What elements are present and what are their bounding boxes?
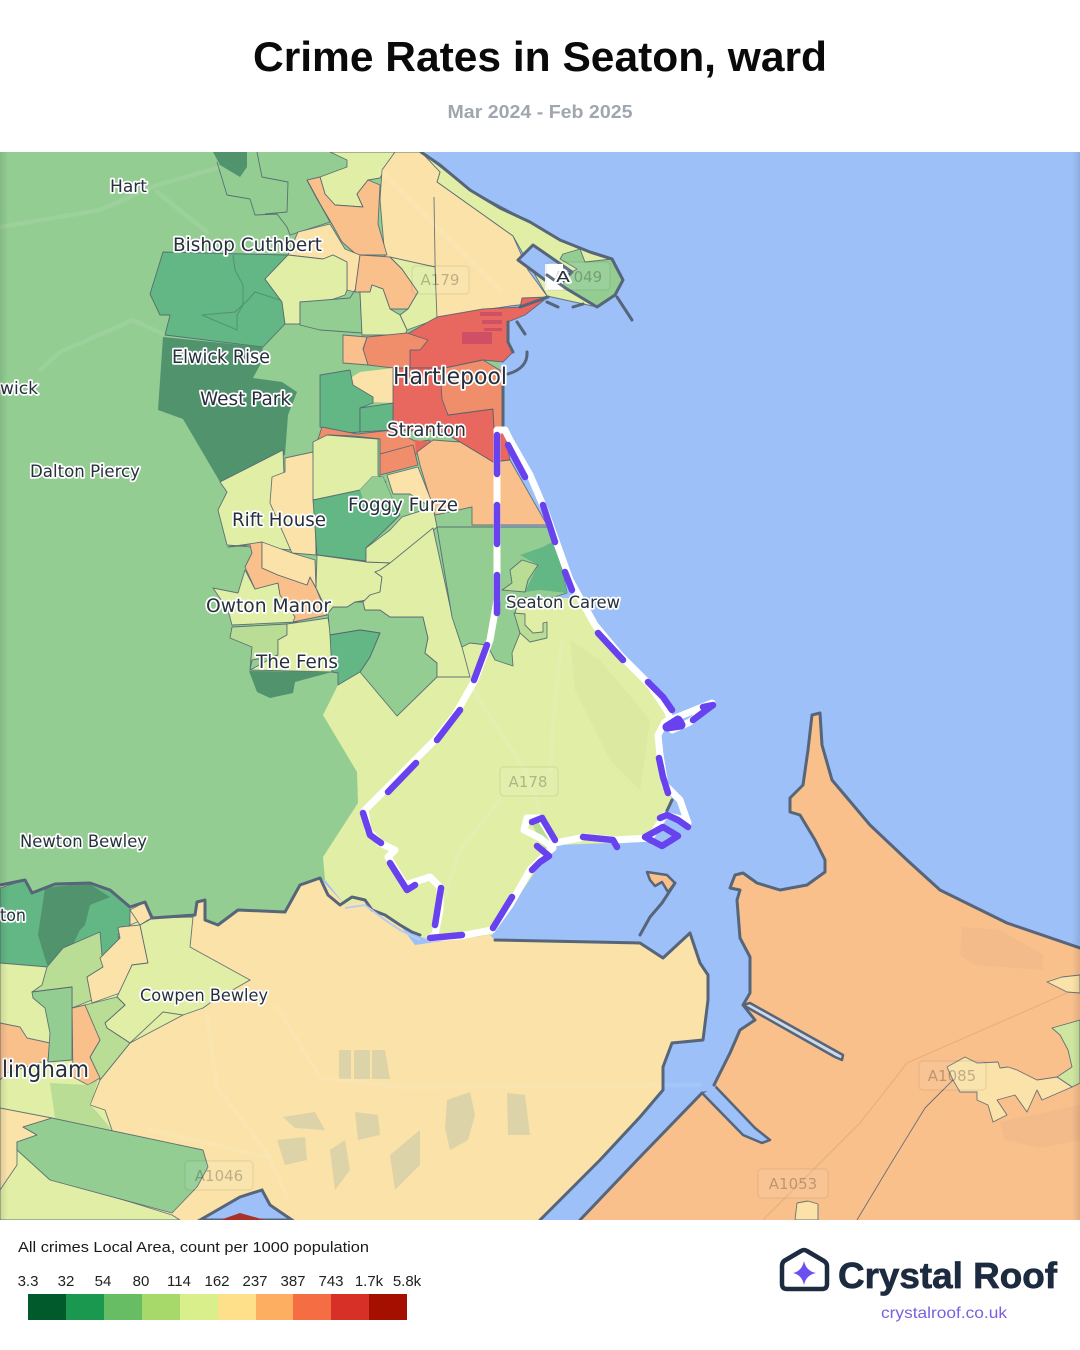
place labels: Foggy Furze — [348, 494, 458, 516]
road shields — [185, 262, 986, 1198]
place labels: Seaton Carew — [506, 593, 620, 613]
website link: crystalroof.co.uk — [881, 1305, 1008, 1322]
legend scale values: 3.3 — [18, 1273, 38, 1290]
road shields: A1049 — [554, 268, 602, 286]
headland green and harbour — [518, 245, 632, 320]
title: Crime Rates in Seaton, ward — [253, 33, 827, 80]
place labels: Hartlepool — [393, 364, 507, 390]
legend scale values: 54 — [95, 1273, 111, 1290]
sea background — [322, 152, 1080, 1220]
legend scale values: 80 — [133, 1273, 149, 1290]
place labels: Rift House — [232, 509, 326, 531]
land: east orange area — [580, 713, 1080, 1220]
place labels: West Park — [200, 388, 291, 410]
legend scale values: 237 — [242, 1273, 268, 1290]
place labels: Hart — [110, 177, 147, 197]
legend scale values: 1.7k — [355, 1273, 384, 1290]
logo wordmark: Crystal Roof — [838, 1255, 1058, 1296]
faint roads — [0, 168, 700, 1197]
legend scale values: 387 — [280, 1273, 306, 1290]
place labels: wick — [0, 379, 38, 399]
date range subtitle: Mar 2024 - Feb 2025 — [448, 102, 632, 122]
legend scale values — [18, 1273, 422, 1290]
land: northern base area — [0, 152, 560, 925]
legend scale values: 743 — [318, 1273, 344, 1290]
place labels: Stranton — [387, 419, 466, 441]
road shields: A1085 — [928, 1067, 976, 1085]
place labels: The Fens — [255, 651, 338, 673]
Seaton Carew green wards — [436, 526, 568, 849]
coastline and river outline — [0, 152, 1080, 1220]
place labels — [0, 177, 620, 1083]
south-west wards: Billingham and Cowpen Bewley — [0, 880, 250, 1220]
icon: house with star — [782, 1250, 827, 1289]
land: southern estuary yellow area — [0, 878, 708, 1220]
place labels: A — [556, 268, 571, 286]
place labels: Cowpen Bewley — [140, 986, 268, 1006]
legend — [18, 1239, 422, 1320]
place labels: Dalton Piercy — [30, 462, 140, 482]
legend scale values: 162 — [204, 1273, 230, 1290]
Seaton ward land — [323, 598, 672, 940]
ward boundary: Seaton — [363, 430, 713, 938]
legend scale values: 114 — [167, 1273, 191, 1290]
northern wards — [150, 152, 623, 347]
road shields: A179 — [421, 271, 459, 289]
place labels: Bishop Cuthbert — [173, 234, 322, 256]
place labels: Newton Bewley — [20, 832, 147, 852]
road shields: A1053 — [769, 1175, 817, 1193]
road shields: A1046 — [195, 1167, 243, 1185]
place labels: ton — [0, 906, 26, 926]
legend scale values: 32 — [58, 1273, 74, 1290]
Hartlepool centre high-crime wards — [317, 297, 548, 525]
dashed purple segments — [363, 435, 713, 938]
legend title: All crimes Local Area, count per 1000 population — [18, 1239, 369, 1256]
east land faint road — [763, 993, 1067, 1220]
east land darker patches — [960, 927, 1080, 1148]
western wards: Elwick Rise, West Park, Rift House — [158, 337, 435, 561]
southern Hartlepool wards: Owton Manor, The Fens — [213, 507, 470, 716]
logo: Crystal Roof — [782, 1250, 1058, 1322]
place labels: Owton Manor — [206, 595, 331, 617]
legend colour bar — [28, 1294, 407, 1320]
estuary jetties and dock channels — [200, 872, 843, 1220]
road shields: A178 — [509, 773, 547, 791]
legend scale values: 5.8k — [393, 1273, 422, 1290]
east land wards — [795, 975, 1080, 1220]
choropleth map — [0, 152, 1080, 1220]
place labels: Elwick Rise — [172, 346, 270, 368]
estuary patches and marsh — [277, 1050, 530, 1190]
place labels: lingham — [2, 1057, 89, 1083]
